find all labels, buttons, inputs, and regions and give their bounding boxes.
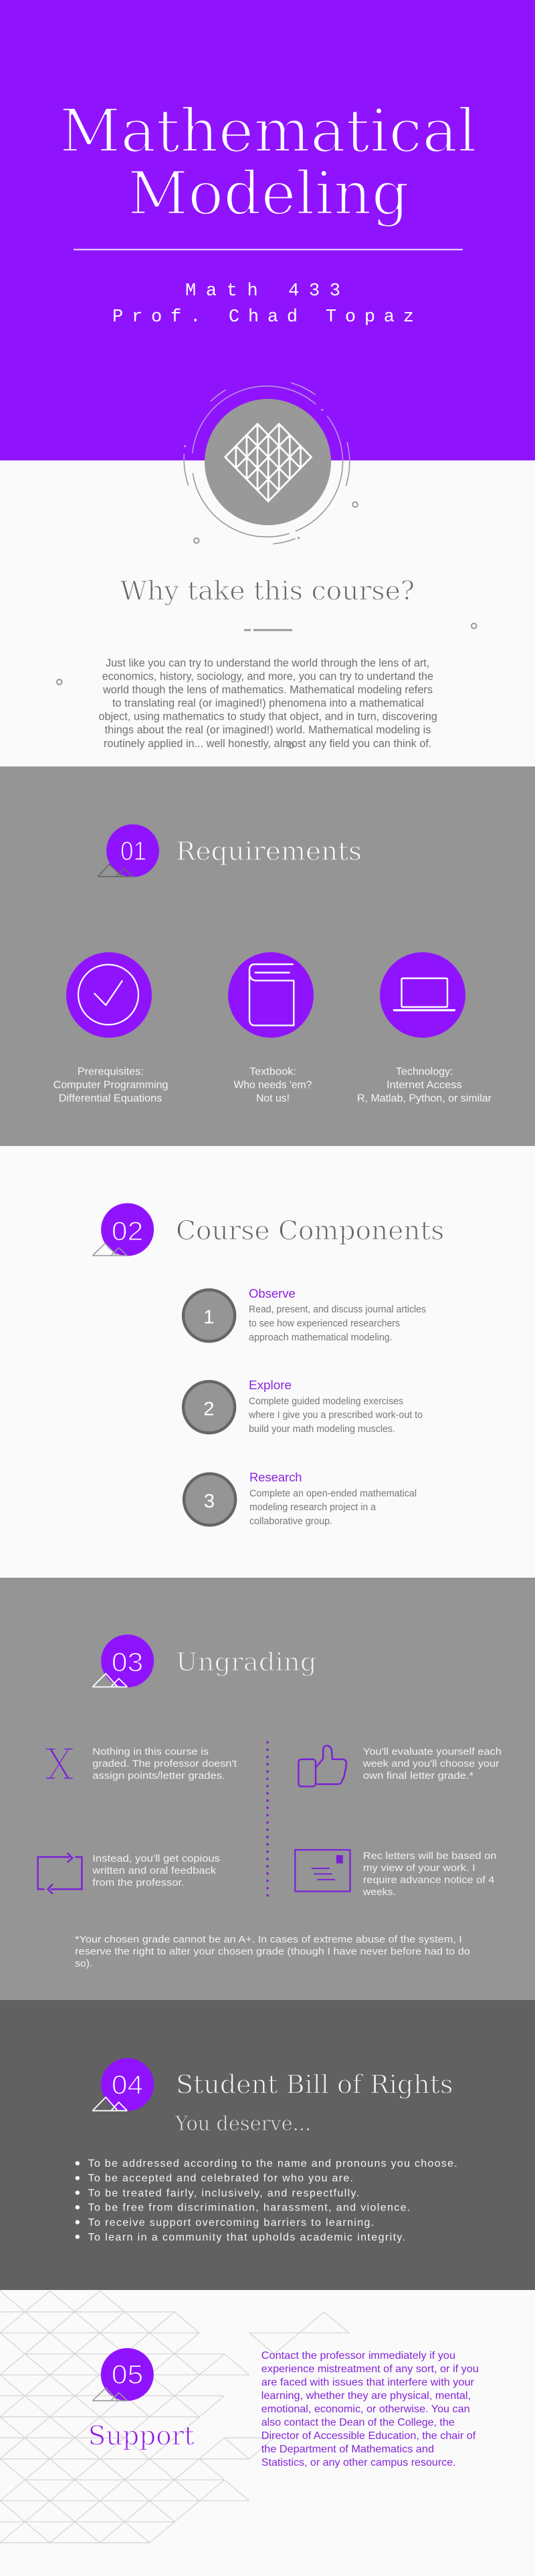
- text: feedback: written and oral feedback: [92, 1865, 217, 1876]
- text: textbook: Textbook:: [249, 1066, 296, 1077]
- text: rec letters: my view of your work. I: [363, 1862, 475, 1874]
- section number 01: 01: [120, 837, 146, 866]
- text block: contact info: learning, whether they are physical, mental,: [261, 2390, 471, 2402]
- text: self evaluation: own final letter grade.*: [363, 1770, 473, 1781]
- dotted divider: [266, 1743, 269, 1895]
- text block: course description: things about the real (or imagined!) world. Mathematical modeling is: [105, 724, 431, 736]
- icon: feedback loop arrows: [38, 1853, 82, 1894]
- footnote: reserve the right to alter your chosen grade (though I have never before had to do: [75, 1946, 470, 1957]
- section number 05: [92, 2348, 154, 2401]
- text: feedback: from the professor.: [92, 1877, 185, 1888]
- title: [60, 96, 477, 228]
- text block: contact info: the Department of Mathematics and: [261, 2444, 434, 2455]
- subtitle: course and professor: Prof. Chad Topaz: [112, 307, 414, 327]
- text block: contact info: Contact the professor immediately if you: [261, 2350, 455, 2362]
- text: self evaluation: [362, 1746, 502, 1781]
- text block: contact info: are faced with issues that interfere with your: [261, 2377, 475, 2388]
- panel: requirements: [0, 766, 535, 1146]
- heading: student bill of rights: Student Bill of Rights: [176, 2070, 453, 2100]
- text: nothing graded: graded. The professor doesn't: [92, 1758, 237, 1769]
- text block: contact info: Statistics, or any other campus resource.: [261, 2457, 456, 2468]
- title: Modeling: [128, 158, 409, 228]
- section number 04: [92, 2058, 154, 2111]
- text block: contact info: [261, 2350, 479, 2468]
- list: rights: To receive support overcoming barriers to learning.: [88, 2217, 374, 2229]
- panel: header: [0, 0, 535, 460]
- item: explore: Complete guided modeling exercises: [249, 1395, 403, 1407]
- text block: course description: routinely applied in... well honestly, almost any field you can think of.: [104, 738, 431, 750]
- text: textbook: [234, 1066, 312, 1104]
- text block: course description: Just like you can try to understand the world through the lens of art,: [106, 657, 429, 669]
- footnote: so).: [75, 1958, 92, 1969]
- item: explore: Explore: [249, 1378, 292, 1392]
- lattice icon: [225, 424, 312, 501]
- text: self evaluation: You'll evaluate yourself each: [363, 1746, 502, 1757]
- text: prerequisites: Prerequisites:: [78, 1066, 144, 1077]
- text block: course description: [98, 657, 437, 750]
- text: nothing graded: assign points/letter grades.: [92, 1770, 225, 1781]
- list: rights: To be accepted and celebrated for who you are.: [88, 2173, 353, 2184]
- text: feedback: [92, 1853, 220, 1888]
- heading: course components: Course Components: [176, 1216, 444, 1246]
- footnote: *Your chosen grade cannot be an A+. In cases of extreme abuse of the system, I: [75, 1934, 462, 1945]
- heading underline: [244, 629, 292, 631]
- section number 03: [92, 1634, 154, 1687]
- panel: ungrading: [0, 1578, 535, 2000]
- list: rights: [76, 2158, 457, 2243]
- text: rec letters: weeks.: [362, 1886, 396, 1898]
- item: explore: 2: [203, 1399, 214, 1420]
- text: nothing graded: [92, 1746, 237, 1781]
- text: self evaluation: week and you'll choose your: [362, 1758, 499, 1769]
- text: technology: R, Matlab, Python, or similar: [357, 1093, 492, 1104]
- icon: X: [46, 1749, 73, 1778]
- section number 01: [98, 825, 159, 877]
- item: observe: Read, present, and discuss journal articles: [249, 1304, 426, 1315]
- panel: support: [0, 2291, 479, 2543]
- item: observe: approach mathematical modeling.: [249, 1332, 393, 1343]
- item: research: 3: [204, 1491, 215, 1512]
- item: explore: build your math modeling muscles.: [249, 1423, 395, 1435]
- footnote: [75, 1934, 470, 1969]
- subtitle: course and professor: Math 433: [185, 281, 340, 301]
- text block: course description: world though the lens of mathematics. Mathematical modeling refers: [102, 684, 433, 696]
- subtitle: course and professor: [112, 281, 414, 327]
- text: feedback: Instead, you'll get copious: [92, 1853, 220, 1864]
- item: observe: 1: [203, 1307, 214, 1328]
- text: rec letters: [362, 1850, 496, 1898]
- text: nothing graded: Nothing in this course is: [92, 1746, 209, 1757]
- text: rec letters: Rec letters will be based on: [363, 1850, 496, 1862]
- panel: student bill of rights: [0, 2000, 535, 2290]
- text block: contact info: also contact the Dean of the College, the: [261, 2417, 455, 2428]
- icon: laptop: [380, 952, 465, 1038]
- heading: ungrading: Ungrading: [176, 1648, 317, 1677]
- text: technology: Technology:: [396, 1066, 453, 1077]
- rings on white: [183, 460, 358, 545]
- rings on purple: [183, 382, 350, 460]
- heading: support: Support: [88, 2422, 195, 2452]
- text: prerequisites: [54, 1066, 168, 1104]
- heading: why take this course: Why take this course?: [120, 577, 415, 607]
- list: rights: To be treated fairly, inclusively, and respectfully.: [88, 2188, 359, 2199]
- section number 05: 05: [112, 2360, 143, 2390]
- text block: contact info: experience mistreatment of any sort, or if you: [261, 2364, 479, 2375]
- text: textbook: Who needs 'em?: [234, 1079, 312, 1091]
- section number 02: [92, 1203, 154, 1256]
- text block: course description: economics, history, sociology, and more, you can try to undertand the: [102, 671, 433, 683]
- item: explore: where I give you a prescribed work-out to: [248, 1409, 423, 1421]
- item: research: Complete an open-ended mathematical: [249, 1487, 417, 1499]
- icon: book: [228, 952, 314, 1038]
- item: research: collaborative group.: [249, 1516, 332, 1527]
- item: observe: to see how experienced researchers: [249, 1318, 400, 1329]
- item: observe: [183, 1286, 426, 1343]
- section number 03: 03: [112, 1648, 143, 1677]
- text block: course description: object, using mathematics to study that object, and in turn, discovering: [98, 711, 437, 723]
- text block: contact info: Director of Accessible Education, the chair of: [261, 2430, 476, 2442]
- text: rec letters: require advance notice of 4: [363, 1874, 494, 1886]
- title: Mathematical: [60, 96, 477, 166]
- item: research: modeling research project in a: [249, 1501, 377, 1513]
- section number 02: 02: [112, 1217, 143, 1246]
- icon: envelope: [295, 1850, 350, 1891]
- list: rights: To be free from discrimination, harassment, and violence.: [88, 2202, 410, 2214]
- text: prerequisites: Computer Programming: [54, 1079, 168, 1091]
- list: rights: To learn in a community that upholds academic integrity.: [88, 2232, 405, 2243]
- text block: contact info: emotional, economic, or otherwise. You can: [261, 2404, 470, 2415]
- text block: course description: to translating real (or imagined!) phenomena into a mathematical: [112, 698, 424, 710]
- item: research: Research: [249, 1470, 302, 1484]
- text: textbook: Not us!: [256, 1093, 290, 1104]
- heading: requirements: Requirements: [176, 837, 362, 866]
- icon: check mark: [66, 952, 152, 1038]
- title rule: [74, 249, 463, 250]
- subheading: you deserve: You deserve...: [175, 2112, 311, 2136]
- item: research: [184, 1470, 417, 1527]
- section number 04: 04: [112, 2071, 143, 2100]
- text: prerequisites: Differential Equations: [59, 1093, 162, 1104]
- panel: course components: [92, 1203, 444, 1527]
- icon: thumbs up: [298, 1745, 346, 1786]
- decorative dots: [57, 623, 476, 748]
- item: observe: Observe: [249, 1286, 296, 1300]
- text: technology: Internet Access: [387, 1079, 462, 1091]
- item: explore: [183, 1378, 423, 1435]
- icon: lattice medallion with rings: [184, 383, 358, 544]
- list: rights: To be addressed according to the name and pronouns you choose.: [88, 2158, 457, 2170]
- text: technology: [357, 1066, 492, 1104]
